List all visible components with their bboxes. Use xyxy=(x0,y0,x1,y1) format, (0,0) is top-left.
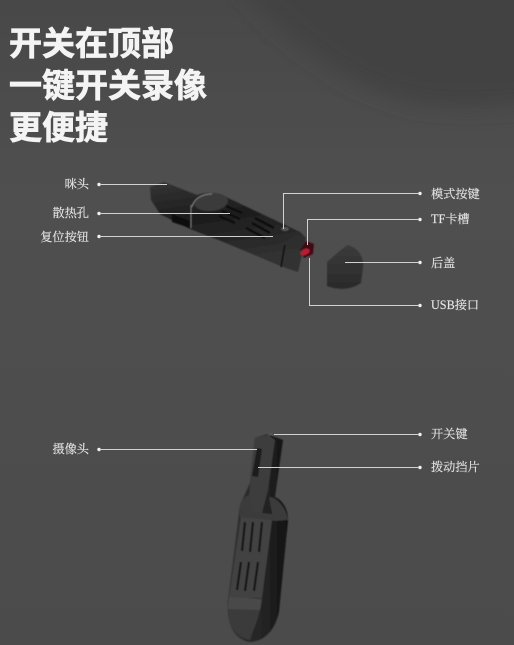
end cap seam xyxy=(281,244,285,267)
labels xyxy=(40,176,480,474)
labels: 咪头 xyxy=(65,176,90,191)
labels: 摄像头 xyxy=(52,441,90,456)
clip plate xyxy=(229,517,272,598)
leader: 摄像头 xyxy=(97,448,257,451)
labels: 开关键 xyxy=(431,426,468,441)
camera body xyxy=(150,182,306,272)
title: 开关在顶部 xyxy=(9,25,174,62)
leader: 开关键 xyxy=(274,433,422,436)
clip foot xyxy=(228,603,261,640)
title xyxy=(9,25,207,146)
back cover xyxy=(327,245,363,289)
clip under body xyxy=(172,214,190,228)
plate band xyxy=(228,597,262,610)
leader: USB接口 xyxy=(310,258,422,307)
labels: 模式按键 xyxy=(431,186,480,201)
title: 更便捷 xyxy=(9,109,108,146)
top switch xyxy=(267,433,276,436)
clip hump xyxy=(193,192,229,212)
leader: 后盖 xyxy=(345,261,422,264)
product: camera open view xyxy=(150,182,314,272)
clip hump edge xyxy=(192,194,212,207)
labels: 后盖 xyxy=(431,256,455,270)
product: camera closed view xyxy=(228,433,288,642)
leader: 复位按钮 xyxy=(97,235,273,238)
front face xyxy=(249,435,275,513)
labels: 拨动挡片 xyxy=(431,459,480,474)
leader: 拨动挡片 xyxy=(258,466,422,469)
mode button xyxy=(281,227,289,231)
leader: 咪头 xyxy=(97,183,167,186)
grip slots xyxy=(237,522,262,591)
labels: 散热孔 xyxy=(52,205,89,220)
title: 一键开关录像 xyxy=(9,67,207,104)
labels: TF卡槽 xyxy=(431,211,470,226)
button strip xyxy=(252,448,262,477)
labels: USB接口 xyxy=(431,297,479,312)
rear clip xyxy=(228,434,288,642)
leader: 散热孔 xyxy=(97,212,230,215)
shoulder xyxy=(240,495,288,521)
labels: 复位按钮 xyxy=(40,229,89,244)
red TF slot xyxy=(300,241,314,258)
red light xyxy=(299,247,311,257)
leader: TF卡槽 xyxy=(308,218,422,245)
ventilation slots xyxy=(219,206,274,238)
leader: 模式按键 xyxy=(284,192,422,229)
dark corner shape xyxy=(225,0,514,107)
